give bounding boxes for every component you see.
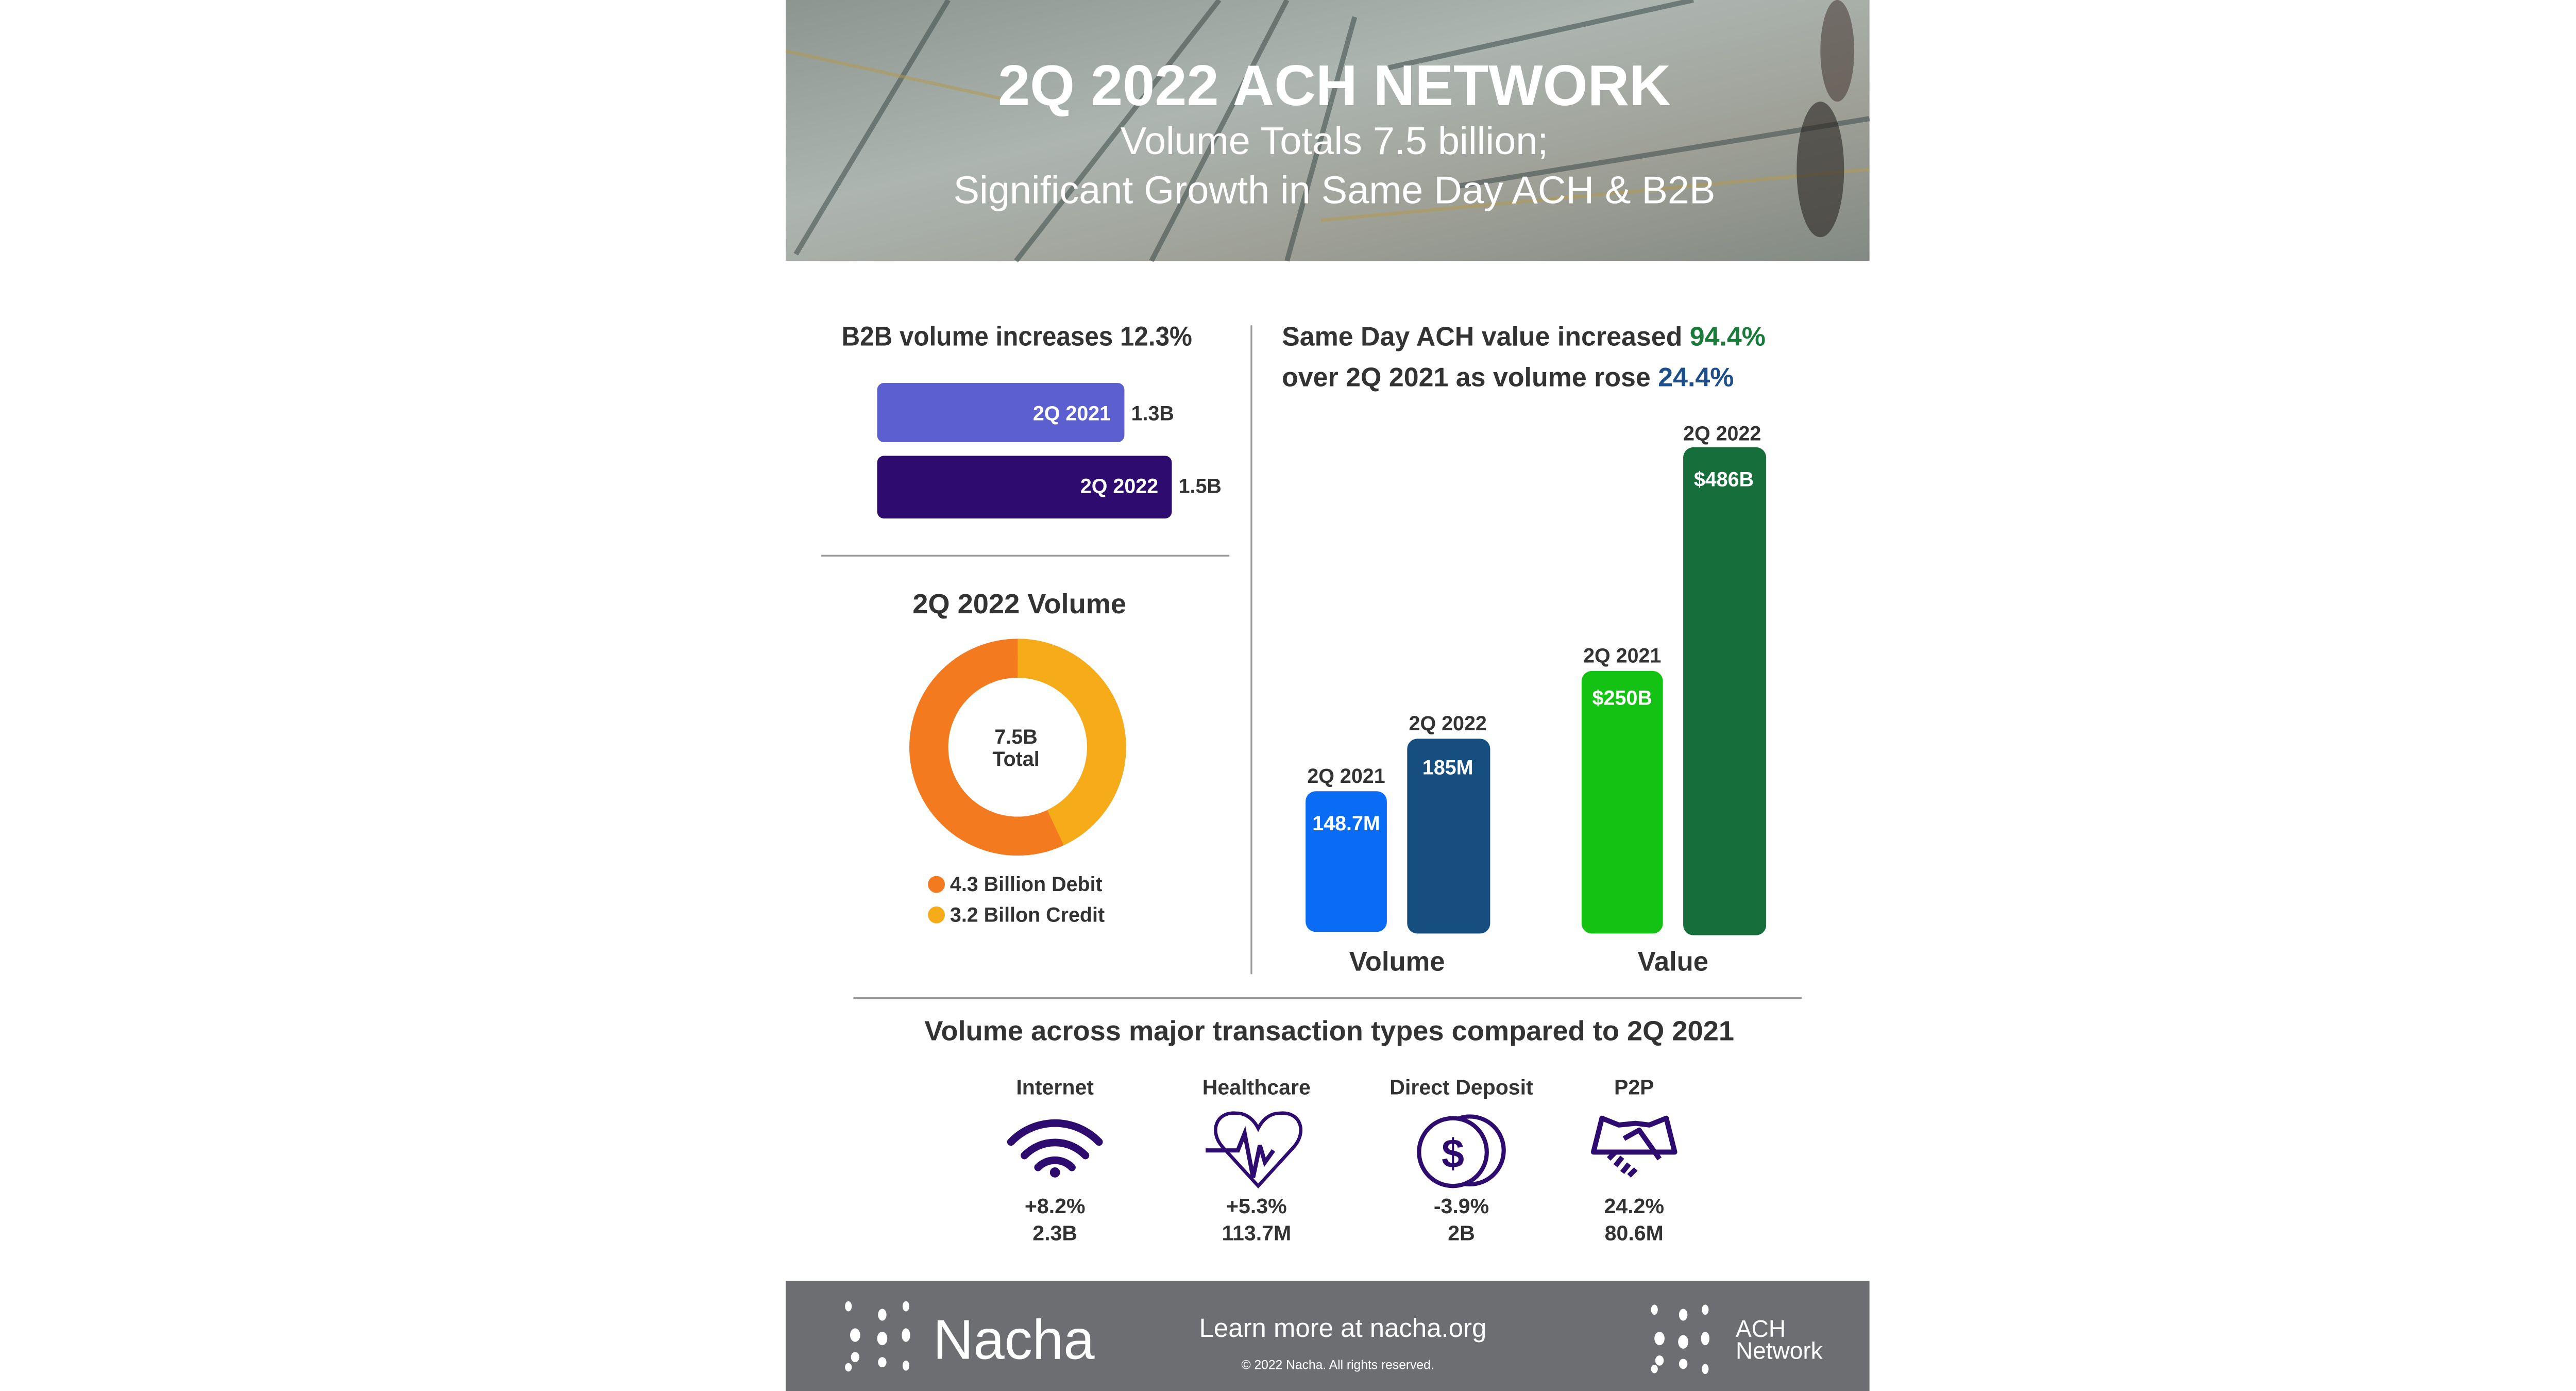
item: P2P: 24.2%	[1604, 1194, 1664, 1218]
bar chart: volume: 185M	[1422, 756, 1473, 779]
legend: 3.2 Billon Credit	[950, 903, 1105, 926]
bar chart: volume: 2Q 2022	[1409, 712, 1487, 735]
logo: ACH Network: Network	[1736, 1337, 1823, 1364]
item: Internet	[1011, 1076, 1099, 1245]
item: Direct Deposit: 2B	[1448, 1221, 1475, 1245]
bar chart: volume	[1306, 712, 1490, 977]
logo: Nacha	[845, 1301, 1095, 1371]
footer text: Learn more at nacha.org	[1199, 1313, 1486, 1343]
bar: 2Q 2022: 2Q 2022	[1080, 475, 1158, 498]
item: Internet: Internet	[1016, 1076, 1094, 1099]
icon: heart pulse	[1206, 1113, 1301, 1186]
panel: Same Day ACH: over 2Q 2021 as volume rose 24.4%	[1282, 363, 1734, 393]
panel: Same Day ACH	[1282, 322, 1766, 977]
subtitle: Volume Totals 7.5 billion;	[1121, 120, 1548, 163]
donut chart: 7.5B	[994, 726, 1038, 748]
legend	[928, 873, 1105, 926]
item: Direct Deposit: -3.9%	[1434, 1194, 1489, 1218]
bar chart: volume: Volume	[1349, 947, 1445, 977]
bar chart: value: 2Q 2022	[1683, 423, 1761, 445]
footer	[786, 1281, 1870, 1391]
header banner	[786, 0, 1870, 261]
panel: 2Q 2022 volume donut	[912, 589, 1126, 926]
item: Healthcare: 113.7M	[1222, 1221, 1291, 1245]
item: Healthcare	[1202, 1076, 1311, 1245]
subtitle: Significant Growth in Same Day ACH & B2B	[954, 169, 1715, 212]
panel: B2B volume	[842, 322, 1222, 518]
item: Direct Deposit	[1389, 1076, 1533, 1245]
icon: handshake	[1594, 1118, 1675, 1176]
item: P2P: P2P	[1614, 1076, 1654, 1099]
logo: Nacha: Nacha	[933, 1309, 1095, 1371]
item: P2P	[1594, 1076, 1675, 1245]
bar chart: volume: 148.7M	[1312, 812, 1380, 835]
footer: © 2022 Nacha. All rights reserved.	[1241, 1358, 1434, 1372]
heading: B2B: B2B volume increases 12.3%	[842, 322, 1192, 352]
donut chart: Total	[992, 748, 1040, 770]
heading: same day: Same Day ACH value increased 94.4%	[1282, 322, 1766, 352]
item: Healthcare: +5.3%	[1226, 1194, 1287, 1218]
bar chart: value: Value	[1638, 947, 1708, 977]
item: Direct Deposit: Direct Deposit	[1389, 1076, 1533, 1099]
title: 2Q 2022 ACH NETWORK	[998, 53, 1671, 118]
bar chart: volume: 2Q 2021	[1307, 765, 1385, 787]
bar: 2Q 2021	[877, 383, 1174, 442]
item: Internet: +8.2%	[1025, 1194, 1085, 1218]
bar: 2Q 2022	[877, 456, 1222, 518]
bar chart: value	[1582, 423, 1766, 977]
bar chart: value: 2Q 2021	[1583, 644, 1661, 667]
heading: volume: 2Q 2022 Volume	[912, 589, 1126, 619]
donut chart	[929, 658, 1107, 836]
bar: 2Q 2021: 2Q 2021	[1033, 402, 1111, 425]
logo: ACH Network: ACH	[1736, 1315, 1786, 1342]
item: Healthcare: Healthcare	[1202, 1076, 1311, 1099]
bar: 2Q 2022: 1.5B	[1179, 475, 1222, 498]
bar: 2Q 2021: 1.3B	[1131, 402, 1174, 425]
icon: coin	[1419, 1116, 1504, 1186]
heading: transaction types: Volume across major transaction types compared to 2Q 2021	[924, 1015, 1734, 1046]
item: P2P: 80.6M	[1605, 1221, 1664, 1245]
legend: 4.3 Billion Debit	[950, 873, 1103, 896]
logo: ACH Network	[1651, 1304, 1823, 1374]
bar chart: value: $250B	[1592, 687, 1652, 710]
icon: wifi	[1011, 1123, 1099, 1178]
icon: coin: $	[1442, 1131, 1464, 1176]
item: Internet: 2.3B	[1032, 1221, 1077, 1245]
panel: transaction types	[924, 1015, 1734, 1245]
bar chart: value: $486B	[1694, 468, 1754, 491]
